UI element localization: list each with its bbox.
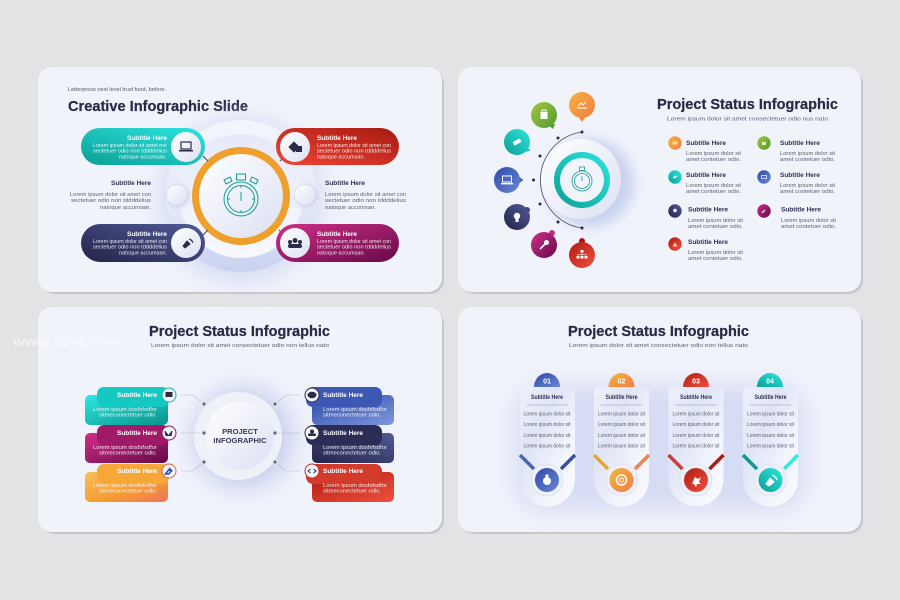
- card: blue: [305, 387, 394, 425]
- panel: numbered columns: [458, 307, 863, 534]
- list item: magenta: amet contetuer odio.: [781, 224, 836, 230]
- pill: magenta: sectetuer odio non tddddelius: [317, 244, 391, 250]
- column 02: Lorem ipsum dolor sit: [598, 422, 645, 428]
- card: orange: Subtitle Here: [117, 468, 157, 475]
- list item: green: amet contetuer odio.: [780, 157, 835, 163]
- card: teal: sitmeconectetuer odio.: [99, 412, 157, 418]
- pill: teal: Subtitle Here: [127, 135, 167, 142]
- panel: project status radial: [458, 67, 863, 294]
- list item: red: amet contetuer odio.: [688, 256, 743, 262]
- list item: navy: Lorem ipsum dolor sit: [688, 218, 743, 224]
- pill: teal: [81, 128, 205, 165]
- watermark: www.25xt.com: [12, 334, 121, 349]
- title: Project Status Infographic: [568, 323, 749, 340]
- pill: red: [276, 128, 399, 165]
- list item: teal: Lorem ipsum dolor sit: [686, 183, 741, 189]
- list item: blue: amet contetuer odio.: [780, 189, 835, 195]
- icon: stopwatch: [224, 174, 258, 216]
- pill: navy: Lorem ipsum dolor sit amet con: [93, 239, 167, 245]
- list item: teal: [668, 170, 741, 195]
- pill: teal: natoque accumsan.: [119, 154, 167, 160]
- list item: orange: Subtitle Here: [686, 140, 727, 147]
- column 01: Lorem ipsum dolor sit: [524, 444, 571, 450]
- subtitle: Lorem ipsum dolor sit amet consectetuer odio non tellus nato: [569, 343, 748, 349]
- card: orange: sitmeconectetuer odio.: [99, 488, 157, 494]
- central stopwatch disc: [541, 139, 634, 227]
- connectors: [181, 395, 300, 471]
- left side knob: [167, 185, 189, 207]
- column 01: [520, 373, 575, 506]
- column 03: 03: [692, 378, 700, 386]
- column 01: Lorem ipsum dolor sit: [524, 422, 571, 428]
- column 01: Lorem ipsum dolor sit: [524, 433, 571, 439]
- pill: navy: Subtitle Here: [127, 231, 167, 238]
- column 02: Lorem ipsum dolor sit: [598, 433, 645, 439]
- panel: creative infographic slide: [38, 67, 444, 294]
- list item: green: [757, 136, 835, 163]
- list item: navy: Subtitle Here: [688, 206, 729, 214]
- subtitle: Lorem ipsum dolor sit amet consectetuer odio nus nato: [667, 116, 828, 122]
- card: magenta: sitmeconectetuer odio.: [99, 450, 157, 456]
- text block: right: natoque accumsan.: [325, 205, 376, 211]
- list item: magenta: Subtitle Here: [781, 206, 822, 214]
- column 03: Lorem ipsum dolor sit: [672, 444, 720, 450]
- card: red: sitmeconectetuer odio.: [323, 488, 381, 494]
- list item: red: Subtitle Here: [688, 239, 729, 246]
- text block: right: Lorem ipsum dolor sit amet con: [325, 192, 406, 198]
- bubble: green calculator: [531, 102, 557, 129]
- bubble: teal eraser: [504, 129, 531, 155]
- list item: red: Lorem ipsum dolor sit: [688, 250, 743, 256]
- pill: magenta: [276, 224, 399, 262]
- list item: teal: Subtitle Here: [686, 172, 727, 179]
- eyebrow text: Letterpress next level trust fund, before.: [68, 87, 166, 93]
- pill: red: natoque accumsan.: [317, 154, 365, 160]
- card: navy: Subtitle Here: [323, 430, 363, 437]
- column 04: Lorem ipsum dolor sit: [747, 412, 794, 418]
- card: red: Subtitle Here: [323, 468, 363, 475]
- list item: red: [668, 237, 743, 262]
- central disc: PROJECT: [222, 427, 258, 436]
- pill: magenta: Subtitle Here: [317, 231, 357, 238]
- card: teal: [85, 387, 176, 425]
- text block: left: [70, 180, 152, 211]
- card: red: Lorem ipsum dosfsfsdfor: [323, 483, 387, 489]
- bubble: orange chart: [569, 92, 595, 122]
- list item: teal: amet contetuer odio.: [686, 189, 741, 195]
- subtitle: Lorem ipsum dolor sit amet consectetuer odio non tellus nato: [151, 343, 329, 349]
- pill: navy: sectetuer odio non tddddelius: [93, 244, 167, 250]
- card: navy: Lorem ipsum dosfsfsdfor: [323, 445, 387, 451]
- column 03: [668, 373, 724, 506]
- card: red: [305, 464, 394, 502]
- column 03: Lorem ipsum dolor sit: [672, 412, 720, 418]
- column 02: Lorem ipsum dolor sit: [598, 412, 645, 418]
- card: teal: Subtitle Here: [117, 392, 157, 399]
- panel: project status cards: [38, 307, 444, 534]
- card: orange: Lorem ipsum dosfsfsdfor: [93, 483, 157, 489]
- pill: navy: [81, 224, 205, 262]
- column 04: [743, 373, 798, 506]
- column glow: [515, 385, 805, 510]
- list item: magenta: Lorem ipsum dolor sit: [781, 218, 836, 224]
- card: blue: Lorem ipsum dosfsfsdfor: [323, 407, 387, 413]
- column 01: Lorem ipsum dolor sit: [524, 412, 571, 418]
- list item: green: Subtitle Here: [780, 140, 821, 147]
- title: Project Status Infographic: [657, 96, 838, 113]
- pill: magenta: natoque accumsan.: [317, 250, 365, 256]
- column 03: Subtitle Here: [680, 394, 712, 401]
- bubble: magenta key: [531, 230, 557, 258]
- title: Project Status Infographic: [149, 323, 330, 340]
- slide title: Creative Infographic Slide: [68, 98, 248, 115]
- column 03: Lorem ipsum dolor sit: [672, 433, 720, 439]
- list item: magenta: [757, 204, 836, 230]
- column 02: Subtitle Here: [606, 394, 638, 401]
- column 01: Subtitle Here: [531, 394, 563, 401]
- column 04: 04: [766, 378, 774, 386]
- text block: right: Subtitle Here: [325, 180, 366, 187]
- pill: teal: sectetuer odio non tddddelius: [93, 148, 167, 154]
- connector nodes: [202, 402, 277, 464]
- list item: orange: [668, 136, 741, 163]
- column 04: Subtitle Here: [754, 394, 787, 401]
- column 01: 01: [543, 378, 551, 386]
- column 04: Lorem ipsum dolor sit: [747, 444, 794, 450]
- card: blue: sitmeconectetuer odio.: [323, 412, 381, 418]
- pill: red: Lorem ipsum dolor sit amet con: [317, 143, 391, 149]
- right side knob: [295, 185, 317, 207]
- column 02: 02: [618, 378, 625, 386]
- pill: magenta: Lorem ipsum dolor sit amet con: [317, 239, 391, 245]
- list item: blue: Subtitle Here: [780, 172, 821, 179]
- pill: navy: natoque accumsan.: [119, 250, 167, 256]
- text block: right: sectetuer odio non tddddelius: [325, 198, 406, 204]
- pill: red: Subtitle Here: [317, 135, 357, 142]
- text block: left: natoque accumsan.: [100, 205, 151, 211]
- list item: green: Lorem ipsum dolor sit: [780, 151, 835, 157]
- icon: stopwatch small: [572, 167, 592, 191]
- card: magenta: Lorem ipsum dosfsfsdfor: [93, 445, 157, 451]
- central disc: [193, 388, 293, 488]
- text block: left: sectetuer odio non tddddelius: [71, 198, 151, 204]
- card: magenta: [85, 425, 176, 463]
- column 04: Lorem ipsum dolor sit: [747, 433, 794, 439]
- list item: navy: amet contetuer odio.: [688, 224, 743, 230]
- bubble: navy bulb: [504, 204, 530, 230]
- card: orange: [85, 464, 176, 502]
- list item: orange: amet contetuer odio.: [686, 157, 741, 163]
- central stopwatch dial: [161, 120, 321, 280]
- column 02: [594, 373, 649, 506]
- list item: orange: Lorem ipsum dolor sit: [686, 151, 741, 157]
- card: navy: [305, 425, 394, 463]
- list item: navy: [668, 204, 743, 230]
- list item: blue: [757, 170, 835, 195]
- card: teal: Lorem ipsum dosfsfsdfor: [93, 407, 157, 413]
- text block: right: [325, 180, 406, 211]
- card: navy: sitmeconectetuer odio.: [323, 450, 381, 456]
- column 04: Lorem ipsum dolor sit: [747, 422, 794, 428]
- arc with dots: [532, 130, 584, 230]
- pill: teal: Lorem ipsum dolor sit amet nor: [93, 143, 167, 149]
- bubble: blue laptop: [494, 167, 524, 193]
- pill: red: sectetuer odio non tddddelius: [317, 148, 391, 154]
- text block: left: Lorem ipsum dolor sit amet con: [70, 192, 151, 198]
- central disc: INFOGRAPHIC: [213, 436, 267, 445]
- bubble: red hierarchy: [569, 238, 595, 268]
- column 02: Lorem ipsum dolor sit: [598, 444, 645, 450]
- connector ticks: [203, 156, 285, 235]
- column 03: Lorem ipsum dolor sit: [672, 422, 720, 428]
- card: blue: Subtitle Here: [323, 392, 363, 399]
- text block: left: Subtitle Here: [111, 180, 152, 187]
- list item: blue: Lorem ipsum dolor sit: [780, 183, 835, 189]
- card: magenta: Subtitle Here: [117, 430, 157, 437]
